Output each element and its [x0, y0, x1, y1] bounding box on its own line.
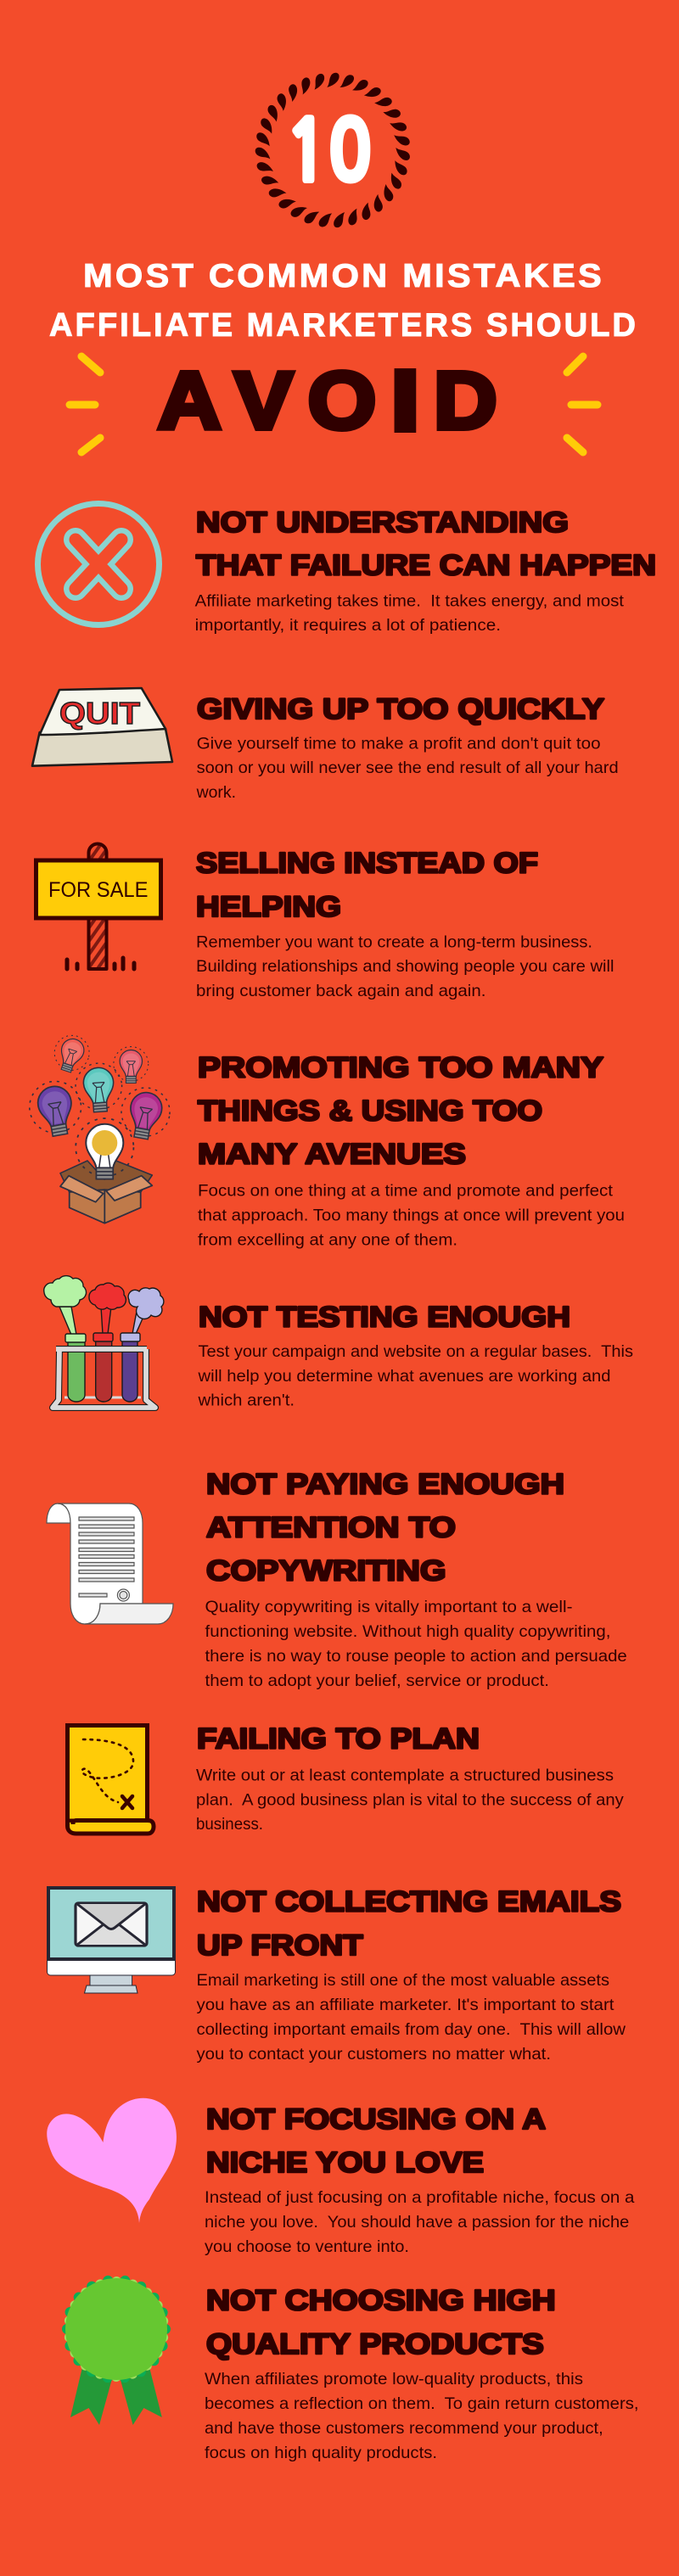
AVOID heading: O — [308, 356, 376, 446]
body text: soon or you will never see the end result of all your hard — [197, 759, 619, 777]
AVOID heading: A — [158, 356, 222, 446]
body text: focus on high quality products. — [205, 2444, 437, 2462]
body text — [205, 2370, 638, 2462]
panel: failing to plan — [68, 1723, 624, 1834]
body text — [197, 1971, 626, 2064]
icon: paper scroll — [47, 1504, 173, 1624]
heading: QUALITY PRODUCTS — [206, 2328, 544, 2360]
heading — [196, 507, 656, 582]
body text: will help you determine what avenues are working and — [197, 1367, 611, 1386]
body text: from excelling at any one of them. — [198, 1230, 457, 1249]
icon: quit sign: QUIT — [59, 696, 140, 731]
AVOID heading: I — [393, 356, 418, 446]
heading: PROMOTING TOO MANY — [198, 1051, 603, 1084]
body text — [195, 591, 625, 635]
body text: that approach. Too many things at once will prevent you — [198, 1206, 625, 1224]
body text: Quality copywriting is vitally important to a well- — [205, 1598, 572, 1616]
icon: pink heart — [47, 2098, 177, 2223]
heading: NOT UNDERSTANDING — [196, 507, 569, 539]
AVOID heading: V — [234, 356, 293, 446]
body text — [198, 1181, 625, 1249]
icon: quit sign — [32, 688, 172, 766]
body text — [196, 734, 619, 802]
heading: THAT FAILURE CAN HAPPEN — [196, 550, 656, 582]
heading: FAILING TO PLAN — [197, 1723, 480, 1756]
panel: not testing enough — [44, 1276, 633, 1410]
heading: NOT CHOOSING HIGH — [206, 2285, 556, 2317]
heading: UP FRONT — [197, 1929, 363, 1962]
heading: THINGS & USING TOO — [198, 1095, 542, 1128]
heading: COPYWRITING — [206, 1555, 446, 1588]
panel: niche you love — [47, 2098, 635, 2256]
body text: Email marketing is still one of the most valuable assets — [197, 1971, 609, 1990]
icon: treasure map — [68, 1726, 154, 1834]
body text: and have those customers recommend your product, — [205, 2419, 603, 2438]
icon: computer with envelope — [48, 1888, 175, 1993]
body text: Affiliate marketing takes time. It takes energy, and most — [195, 591, 625, 610]
body text — [205, 2188, 635, 2256]
body text: Instead of just focusing on a profitable niche, focus on a — [205, 2188, 635, 2207]
body text — [196, 933, 614, 1000]
panel: copywriting — [47, 1469, 627, 1690]
body text — [196, 1766, 624, 1834]
heading — [206, 2103, 546, 2179]
title — [49, 258, 638, 344]
heading: ATTENTION TO — [206, 1512, 456, 1544]
heading: GIVING UP TOO QUICKLY — [197, 693, 604, 725]
panel: giving up too quickly — [32, 688, 619, 802]
body text — [205, 1598, 627, 1690]
heading — [206, 1469, 564, 1588]
body text: Remember you want to create a long-term business. — [196, 933, 592, 952]
heading — [198, 1051, 603, 1171]
body text: becomes a reflection on them. To gain return customers, — [205, 2394, 638, 2413]
heading — [206, 2285, 556, 2360]
body text: which aren't. — [197, 1392, 295, 1410]
body text: you to contact your customers no matter what. — [197, 2045, 551, 2064]
body text: Test your campaign and website on a regular bases. This — [199, 1342, 633, 1361]
title: AFFILIATE MARKETERS SHOULD — [49, 307, 638, 344]
heading: MANY AVENUES — [198, 1139, 466, 1171]
body text: Focus on one thing at a time and promote and perfect — [198, 1181, 614, 1200]
body text — [197, 1342, 633, 1410]
heading — [196, 848, 538, 923]
heading: NOT TESTING ENOUGH — [199, 1301, 570, 1333]
icon: green rosette — [61, 2274, 171, 2425]
body text: importantly, it requires a lot of patience. — [195, 616, 501, 635]
panel: not understanding failure — [37, 504, 656, 635]
heading: NOT PAYING ENOUGH — [206, 1469, 564, 1501]
icon: for sale sign: FOR SALE — [48, 878, 148, 902]
heading — [197, 1886, 621, 1962]
heading: NICHE YOU LOVE — [206, 2147, 484, 2179]
body text: you choose to venture into. — [205, 2237, 409, 2256]
body text: bring customer back again and again. — [196, 982, 485, 1000]
body text: collecting important emails from day one. This will allow — [197, 2020, 626, 2039]
heading: NOT COLLECTING EMAILS — [197, 1886, 621, 1918]
icon: for sale sign — [36, 843, 161, 969]
heading: SELLING INSTEAD OF — [196, 848, 538, 880]
panel: promoting too many things — [25, 1031, 625, 1249]
AVOID heading: D — [434, 356, 497, 446]
heading: HELPING — [196, 891, 341, 923]
body text: them to adopt your belief, service or product. — [205, 1672, 549, 1690]
body text: Building relationships and showing people you care will — [196, 957, 614, 976]
panel: selling instead of helping — [36, 843, 614, 1000]
body text: Write out or at least contemplate a structured business — [196, 1766, 614, 1784]
panel: quality products — [61, 2274, 638, 2462]
sun rays left and right — [70, 356, 598, 452]
body text: you have as an affiliate marketer. It's important to start — [197, 1996, 614, 2014]
number badge: 10 with ring of drops — [255, 73, 411, 228]
title: MOST COMMON MISTAKES — [83, 258, 604, 294]
icon: x in circle — [37, 504, 160, 624]
header — [49, 73, 638, 452]
number badge: 10 with ring of drops: 10 — [285, 110, 372, 193]
body text: there is no way to rouse people to action and persuade — [205, 1647, 627, 1666]
body text: Give yourself time to make a profit and don't quit too — [197, 734, 601, 753]
body text: business. — [196, 1815, 263, 1834]
body text: functioning website. Without high quality copywriting, — [205, 1622, 611, 1641]
body text: work. — [196, 783, 236, 802]
body text: plan. A good business plan is vital to the success of any — [196, 1790, 624, 1809]
icon: light bulbs and box — [25, 1031, 174, 1224]
icon: test tubes — [44, 1276, 164, 1408]
heading: NOT FOCUSING ON A — [206, 2103, 546, 2136]
body text: niche you love. You should have a passion for the niche — [205, 2213, 629, 2232]
body text: When affiliates promote low-quality products, this — [205, 2370, 583, 2388]
panel: collecting emails — [48, 1886, 626, 2064]
